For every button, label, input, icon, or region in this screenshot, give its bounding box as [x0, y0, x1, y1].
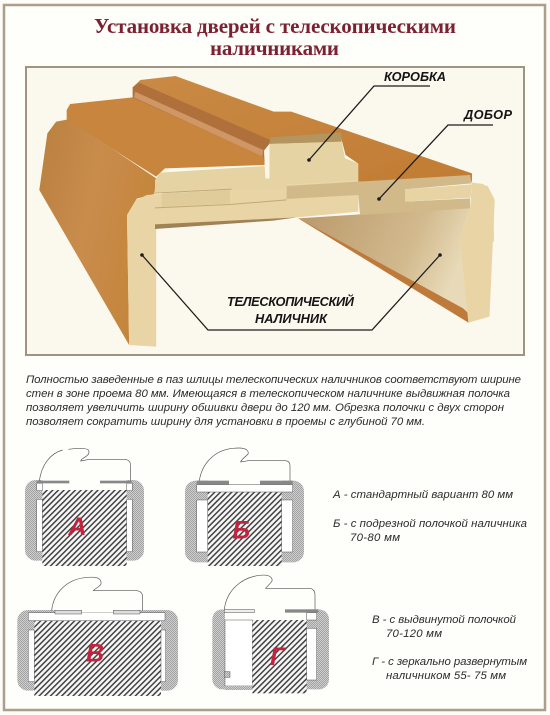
title: наличниками — [210, 36, 339, 60]
legend В Г: Г - с зеркально развернутым — [372, 656, 527, 668]
leader lines — [142, 86, 493, 330]
description text: Полностью заведенные в паз шлицы телескопических наличников соответствуют ширине — [26, 374, 521, 386]
label: коробка: КОРОБКА — [384, 69, 446, 84]
diagram Г: Г — [270, 643, 287, 671]
label: добор: ДОБОР — [463, 107, 512, 122]
diagram А — [25, 448, 144, 566]
legend А Б: Б - с подрезной полочкой наличника — [333, 518, 527, 530]
description text: позволяет сократить ширину для установки в проемы с глубиной 70 мм. — [26, 416, 425, 428]
diagram Б: Б — [232, 516, 250, 544]
leader dots — [140, 158, 442, 257]
tongue shade — [162, 190, 230, 207]
diagram В — [17, 577, 178, 696]
legend А Б: А - стандартный вариант 80 мм — [332, 489, 513, 501]
moulding light edge — [264, 144, 269, 178]
right tongue — [405, 184, 472, 202]
description text: стен в зоне проема 80 мм. Имеющаяся в телескопическом наличнике выдвижная полочка — [26, 388, 510, 400]
interior right panel — [298, 207, 470, 322]
legend В Г: 70-120 мм — [386, 628, 442, 640]
box profile — [155, 142, 358, 193]
diagram В: В — [86, 640, 104, 668]
casing shadow — [155, 217, 297, 229]
description text: позволяет увеличить ширину обшивки двери до 120 мм. Обрезка полочки с двух сторон — [26, 402, 505, 414]
label: телескопический наличник — [227, 293, 355, 326]
casing outer side — [39, 119, 156, 345]
legend А Б — [332, 489, 527, 544]
description text — [26, 374, 521, 428]
inner groove line — [155, 189, 232, 194]
label: телескопический наличник: НАЛИЧНИК — [255, 311, 328, 326]
box end shading — [269, 133, 342, 144]
add-on board — [287, 175, 472, 215]
box top surface — [133, 76, 472, 182]
casing left leg — [127, 194, 156, 347]
diagram Г — [212, 575, 329, 693]
legend В Г — [372, 614, 527, 682]
legend В Г: В - с выдвинутой полочкой — [372, 614, 517, 626]
wide top strip — [67, 97, 265, 177]
label: телескопический наличник: ТЕЛЕСКОПИЧЕСКИЙ — [227, 293, 355, 309]
illustration: wood surfaces — [39, 76, 495, 347]
casing top and tongue — [140, 181, 358, 242]
legend А Б: 70-80 мм — [350, 532, 400, 544]
diagram А: А — [67, 513, 86, 541]
interior edge — [298, 218, 468, 323]
stop moulding — [133, 83, 270, 164]
illustration: cross-section — [140, 133, 494, 242]
diagram Б — [185, 448, 304, 566]
title: Установка дверей с телескопическими — [94, 14, 456, 38]
panel: door frame illustration — [26, 67, 524, 355]
right casing head — [465, 183, 494, 242]
casing right leg — [460, 183, 495, 323]
legend В Г: наличником 55- 75 мм — [386, 670, 506, 682]
title — [94, 14, 456, 60]
